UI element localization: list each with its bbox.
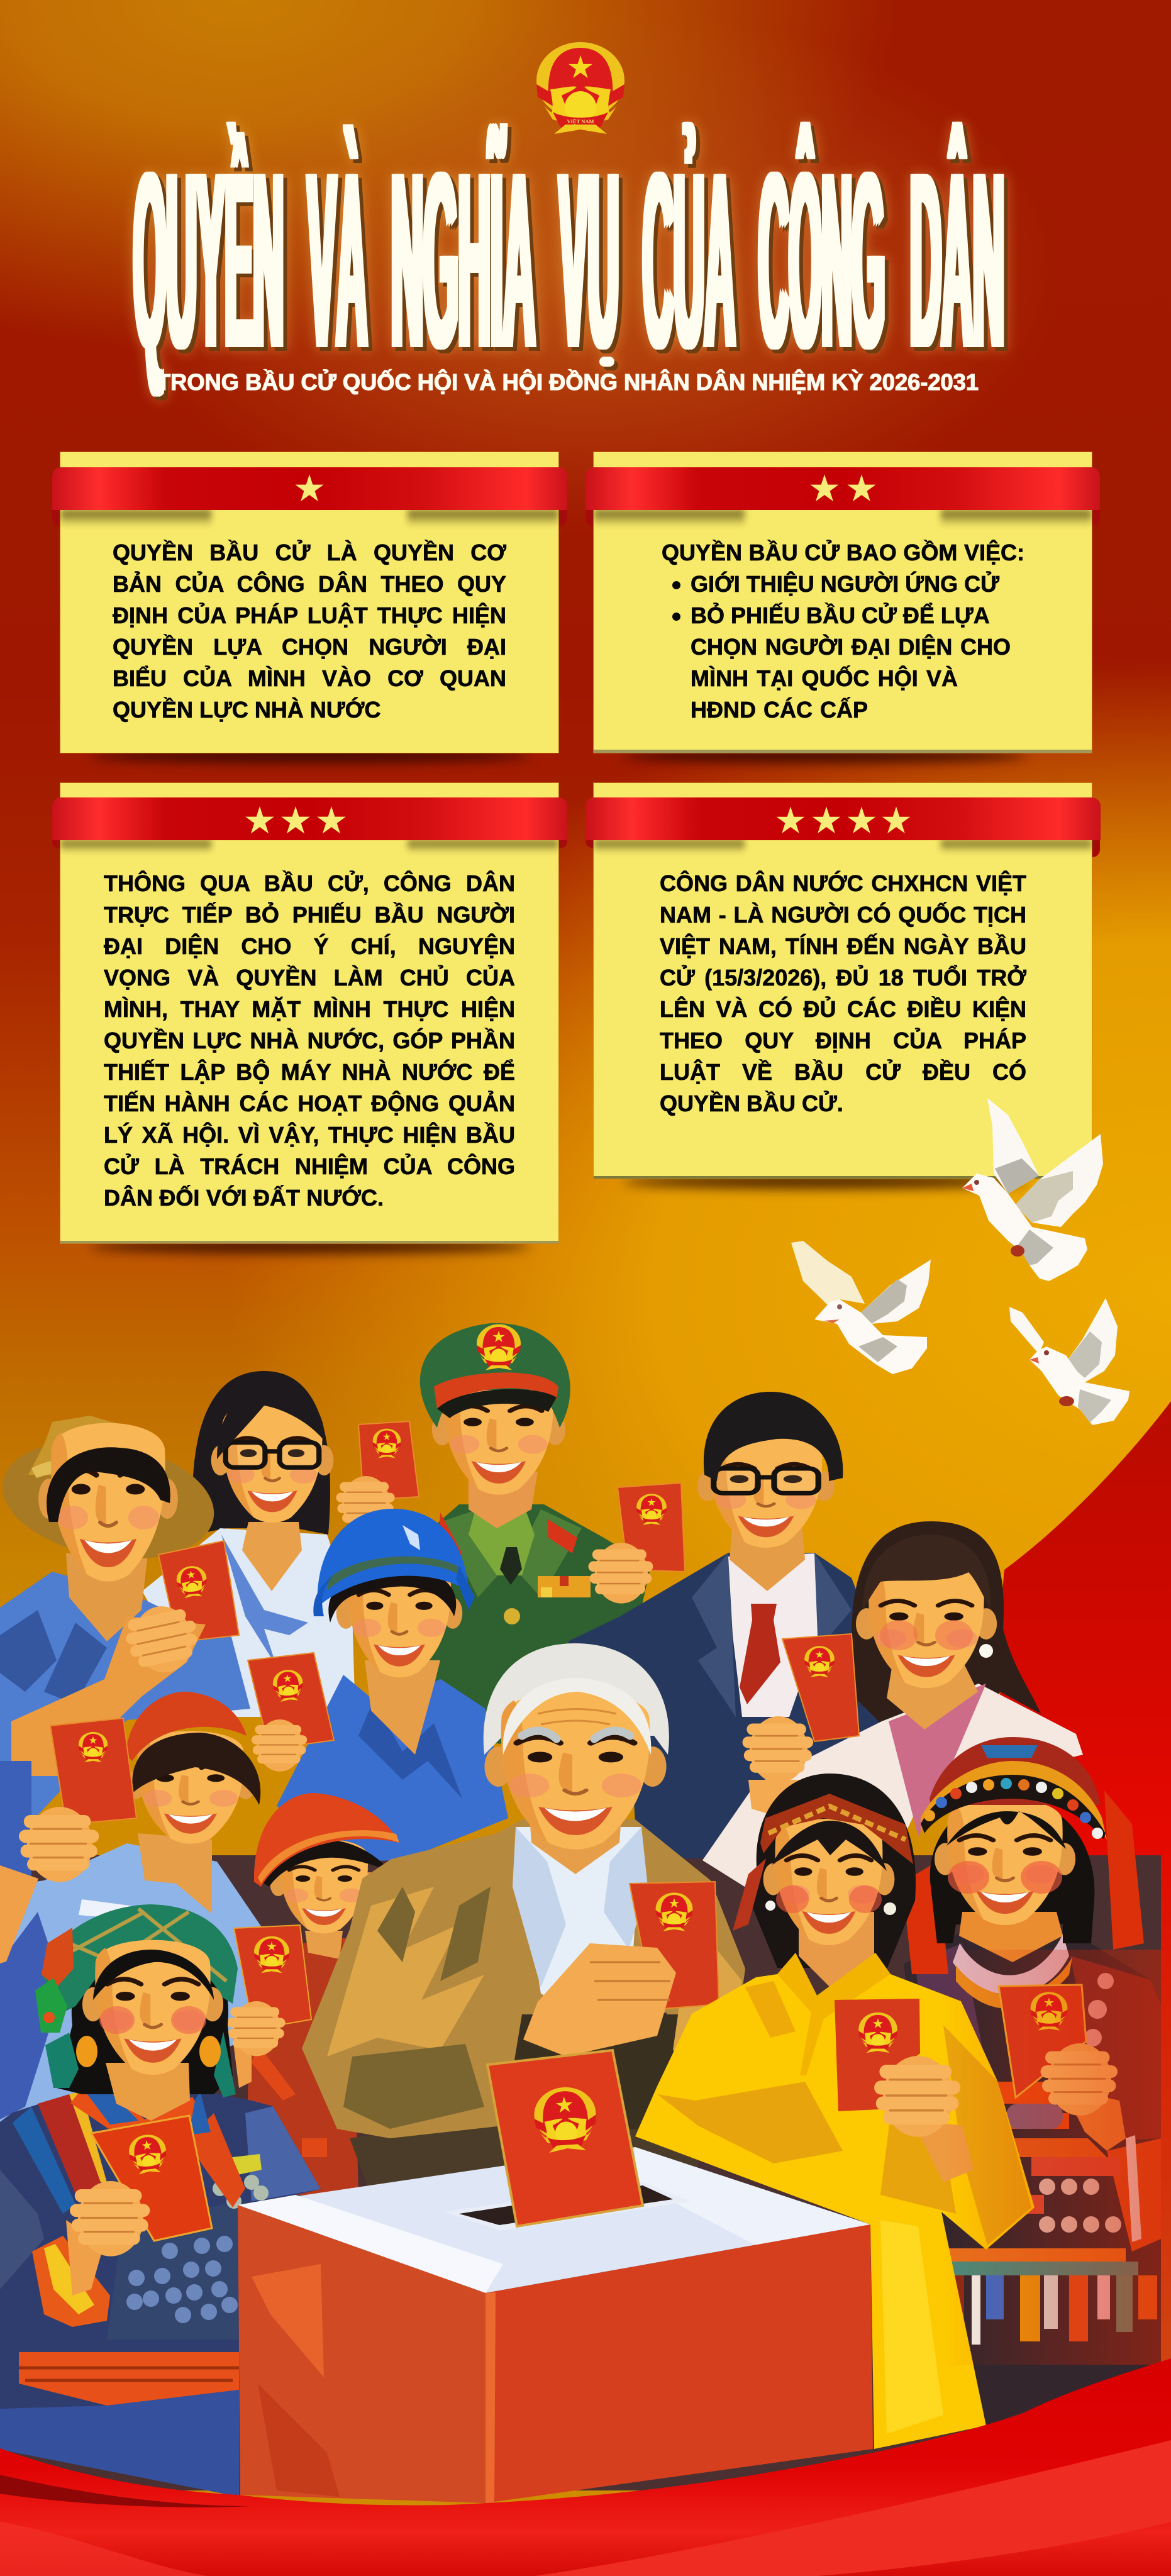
person: ethnic woman, right — [902, 1737, 1161, 2426]
panel: card 2 — [586, 452, 1100, 771]
book: child — [231, 1925, 311, 2088]
person: ethnic woman, front left — [0, 1904, 321, 2497]
red flag backdrop — [1000, 1401, 1171, 2371]
person: woman with glasses — [142, 1371, 355, 1717]
text: TRỰC TIẾP BỎ PHIẾU BẦU NGƯỜI — [104, 902, 515, 927]
stars — [245, 806, 346, 834]
subtitle: TRONG BẦU CỬ QUỐC HỘI VÀ HỘI ĐỒNG NHÂN DÂN NHIỆM KỲ 2026-2031 — [157, 369, 979, 395]
person: boy with red cap — [0, 1692, 264, 2138]
panel: card 4 — [586, 782, 1101, 1197]
book: worker — [248, 1653, 334, 1772]
ribbon — [586, 467, 1100, 510]
text: LÝ XÃ HỘI. VÌ VẬY, THỰC HIỆN BẦU — [104, 1122, 515, 1147]
text: LÊN VÀ CÓ ĐỦ CÁC ĐIỀU KIỆN — [660, 996, 1026, 1021]
dove 1 — [962, 1098, 1103, 1281]
book: boy — [0, 1718, 136, 1963]
panel: card 3 — [52, 782, 567, 1262]
text: ĐẠI DIỆN CHO Ý CHÍ, NGUYỆN — [104, 933, 515, 958]
text: DÂN ĐỐI VỚI ĐẤT NƯỚC. — [104, 1185, 384, 1210]
text: MÌNH TẠI QUỐC HỘI VÀ — [691, 665, 958, 691]
book: woman with glasses — [341, 1421, 419, 1531]
text — [103, 870, 515, 1210]
text: VIỆT NAM, TÍNH ĐẾN NGÀY BẦU — [660, 933, 1026, 958]
dove 2 — [791, 1241, 931, 1374]
panel: card 1 — [52, 452, 567, 771]
person: old man — [302, 1643, 745, 2195]
text: CỬ (15/3/2026), ĐỦ 18 TUỔI TRỞ — [660, 965, 1026, 990]
star — [296, 474, 323, 501]
text: BỎ PHIẾU BẦU CỬ ĐỂ LỰA — [691, 602, 990, 628]
text: QUYỀN BẦU CỬ LÀ QUYỀN CƠ — [113, 540, 506, 565]
person: woman in yellow dress — [635, 1774, 1035, 2449]
ribbon — [52, 467, 567, 510]
person: child with red helmet — [245, 1793, 399, 2195]
hand and arm: farmer — [11, 1601, 206, 1776]
text: GIỚI THIỆU NGƯỜI ỨNG CỬ — [691, 571, 999, 596]
book: man in suit — [594, 1483, 685, 1604]
text: MÌNH, THAY MẶT MÌNH THỰC HIỆN — [104, 996, 515, 1021]
title: VÀ — [308, 119, 367, 401]
text: QUYỀN LỰC NHÀ NƯỚC — [113, 697, 380, 722]
crowd base fill — [0, 1855, 1161, 2490]
person: soldier — [414, 1323, 651, 1755]
text — [112, 540, 507, 722]
book: ethnic woman left — [66, 2116, 212, 2296]
person: construction worker — [277, 1509, 508, 1862]
text: QUYỀN BẦU CỬ BAO GỒM VIỆC: — [662, 540, 1024, 565]
text — [662, 540, 1024, 722]
warm tint on right side of crowd — [943, 1950, 1161, 2365]
person: man in suit — [568, 1392, 889, 1858]
book: ethnic woman right — [999, 1985, 1126, 2151]
text: CỬ LÀ TRÁCH NHIỆM CỦA CÔNG — [104, 1153, 515, 1179]
stars — [776, 806, 911, 833]
text: BIỂU CỦA MÌNH VÀO CƠ QUAN — [113, 665, 506, 691]
text: CÔNG DÂN NƯỚC CHXHCN VIỆT — [660, 870, 1026, 896]
text — [659, 870, 1026, 1116]
text: QUYỀN LỰC NHÀ NƯỚC, GÓP PHẦN — [104, 1028, 515, 1053]
text: QUYỀN BẦU CỬ. — [660, 1091, 843, 1116]
text: THEO QUY ĐỊNH CỦA PHÁP — [660, 1028, 1026, 1053]
text: BẢN CỦA CÔNG DÂN THEO QUY — [113, 571, 506, 596]
ballot paper — [487, 2050, 643, 2226]
book: farmer — [158, 1541, 239, 1642]
text: LUẬT VỀ BẦU CỬ ĐỀU CÓ — [660, 1059, 1026, 1084]
text: VỌNG VÀ QUYỀN LÀM CHỦ CỦA — [104, 965, 515, 990]
text: NAM - LÀ NGƯỜI CÓ QUỐC TỊCH — [660, 902, 1026, 927]
book: yellow dress woman — [835, 1999, 974, 2182]
bottom red ribbon — [0, 2358, 1171, 2576]
book: old man — [523, 1882, 719, 2057]
text: THIẾT LẬP BỘ MÁY NHÀ NƯỚC ĐỂ — [104, 1059, 515, 1084]
dove 3 — [1009, 1298, 1129, 1425]
state emblem — [536, 42, 624, 134]
text: THÔNG QUA BẦU CỬ, CÔNG DÂN — [104, 870, 515, 896]
person: woman with long hair — [702, 1521, 1083, 1893]
text: TIẾN HÀNH CÁC HOẠT ĐỘNG QUẢN — [104, 1091, 515, 1116]
text: QUYỀN LỰA CHỌN NGƯỜI ĐẠI — [113, 634, 506, 659]
illustration: crowd of voters — [0, 1323, 1161, 2503]
text: CHỌN NGƯỜI ĐẠI DIỆN CHO — [691, 634, 1011, 659]
title: QUYỀN — [133, 119, 284, 401]
text: HĐND CÁC CẤP — [691, 697, 868, 722]
stars — [810, 474, 875, 501]
ribbon — [586, 797, 1101, 840]
person: farmer with straw hat — [0, 1416, 250, 1855]
ballot box — [238, 2050, 873, 2503]
ballot slot — [445, 2182, 691, 2231]
title: VỤ — [559, 119, 619, 401]
state emblem: VIỆT NAM — [567, 118, 594, 125]
ribbon — [52, 797, 567, 840]
text: ĐỊNH CỦA PHÁP LUẬT THỰC HIỆN — [113, 602, 506, 628]
book: right woman — [748, 1634, 859, 1818]
